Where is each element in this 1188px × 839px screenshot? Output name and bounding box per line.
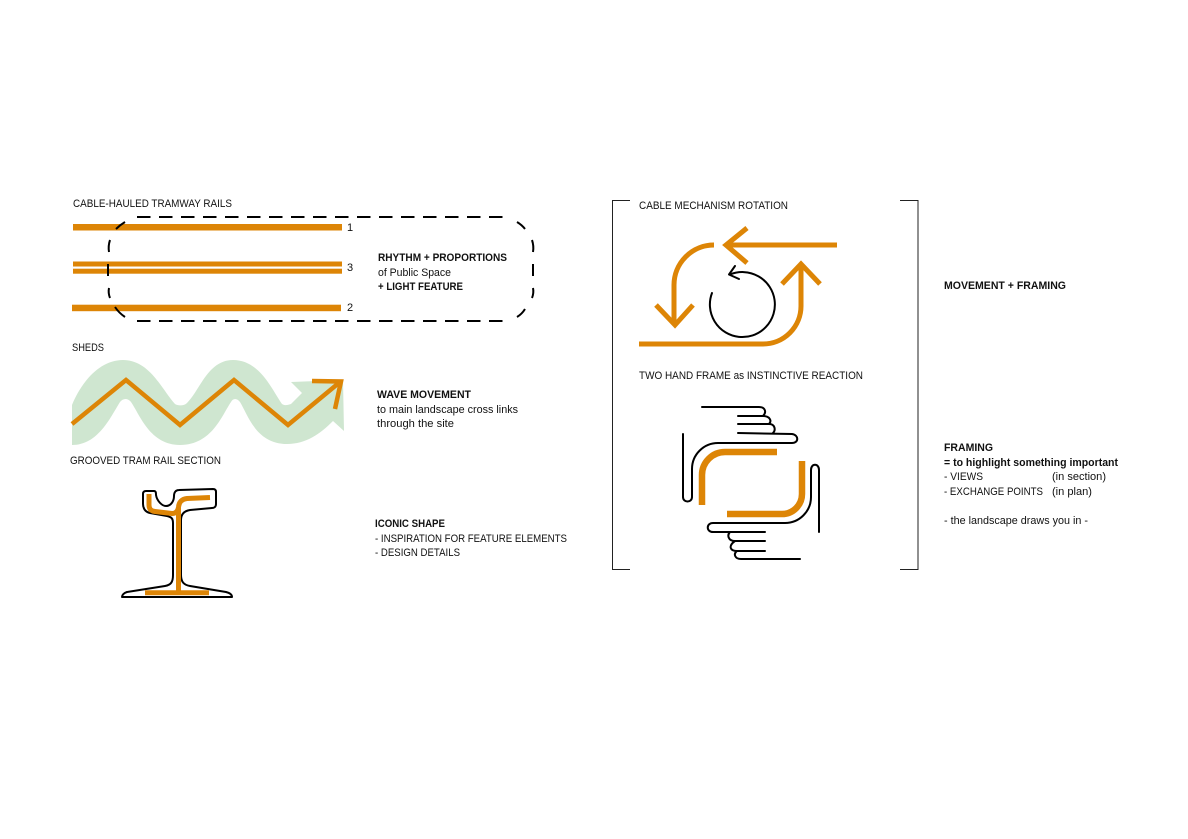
rail number 2: 2 xyxy=(347,302,353,314)
text: framing notes: = to highlight something important xyxy=(944,457,1118,469)
orange rotation arrows xyxy=(639,228,837,344)
text: iconic shape: - DESIGN DETAILS xyxy=(375,547,460,559)
rail number 1: 1 xyxy=(347,222,353,234)
text: framing notes: - the landscape draws you in - xyxy=(944,515,1088,527)
text: wave movement: WAVE MOVEMENT xyxy=(377,389,471,401)
text: rhythm and proportions: RHYTHM + PROPORTIONS xyxy=(378,252,507,264)
text: iconic shape: - INSPIRATION FOR FEATURE ELEMENTS xyxy=(375,533,567,545)
heading: grooved rail: GROOVED TRAM RAIL SECTION xyxy=(70,455,221,467)
text: wave movement: to main landscape cross links xyxy=(377,404,518,416)
rail 1 xyxy=(73,224,342,230)
heading: two hand frame: TWO HAND FRAME as INSTINCTIVE REACTION xyxy=(639,370,863,382)
hand frame diagram xyxy=(683,407,819,559)
orange frame corners xyxy=(702,452,802,514)
text: framing notes: - EXCHANGE POINTS xyxy=(944,486,1043,498)
green wave xyxy=(72,360,344,445)
right bracket xyxy=(900,200,918,570)
text: framing notes xyxy=(944,442,1118,527)
top hand xyxy=(683,407,797,502)
text: framing notes: (in section) xyxy=(1052,471,1106,483)
text: wave movement xyxy=(377,389,518,430)
panel: bracketed diagrams xyxy=(612,200,918,570)
orange zigzag arrow xyxy=(72,380,341,425)
rail number 3: 3 xyxy=(347,262,353,274)
text: movement and framing: MOVEMENT + FRAMING xyxy=(944,280,1066,292)
black circular arrow xyxy=(710,266,775,337)
heading: sheds: SHEDS xyxy=(72,342,104,354)
text: rhythm and proportions xyxy=(378,252,507,293)
heading: rails: CABLE-HAULED TRAMWAY RAILS xyxy=(73,198,232,210)
orange rail core xyxy=(145,494,210,593)
heading: cable mechanism: CABLE MECHANISM ROTATION xyxy=(639,200,788,212)
panel: grooved rail section xyxy=(70,455,567,597)
rail section outline xyxy=(122,489,232,597)
text: rhythm and proportions: + LIGHT FEATURE xyxy=(378,281,463,293)
text: iconic shape xyxy=(375,518,567,559)
rotation diagram xyxy=(639,228,837,344)
text: framing notes: FRAMING xyxy=(944,442,993,454)
bottom hand xyxy=(708,465,819,559)
dashed outline xyxy=(108,217,533,321)
left bracket xyxy=(612,200,630,570)
rail 3 xyxy=(73,262,342,274)
text: rhythm and proportions: of Public Space xyxy=(378,267,451,279)
text: iconic shape: ICONIC SHAPE xyxy=(375,518,445,530)
panel: sheds xyxy=(72,342,518,445)
text: wave movement: through the site xyxy=(377,418,454,430)
panel: tramway rails xyxy=(72,198,533,321)
text: framing notes: - VIEWS xyxy=(944,471,983,483)
text: framing notes: (in plan) xyxy=(1052,486,1092,498)
rail 2 xyxy=(72,305,341,311)
